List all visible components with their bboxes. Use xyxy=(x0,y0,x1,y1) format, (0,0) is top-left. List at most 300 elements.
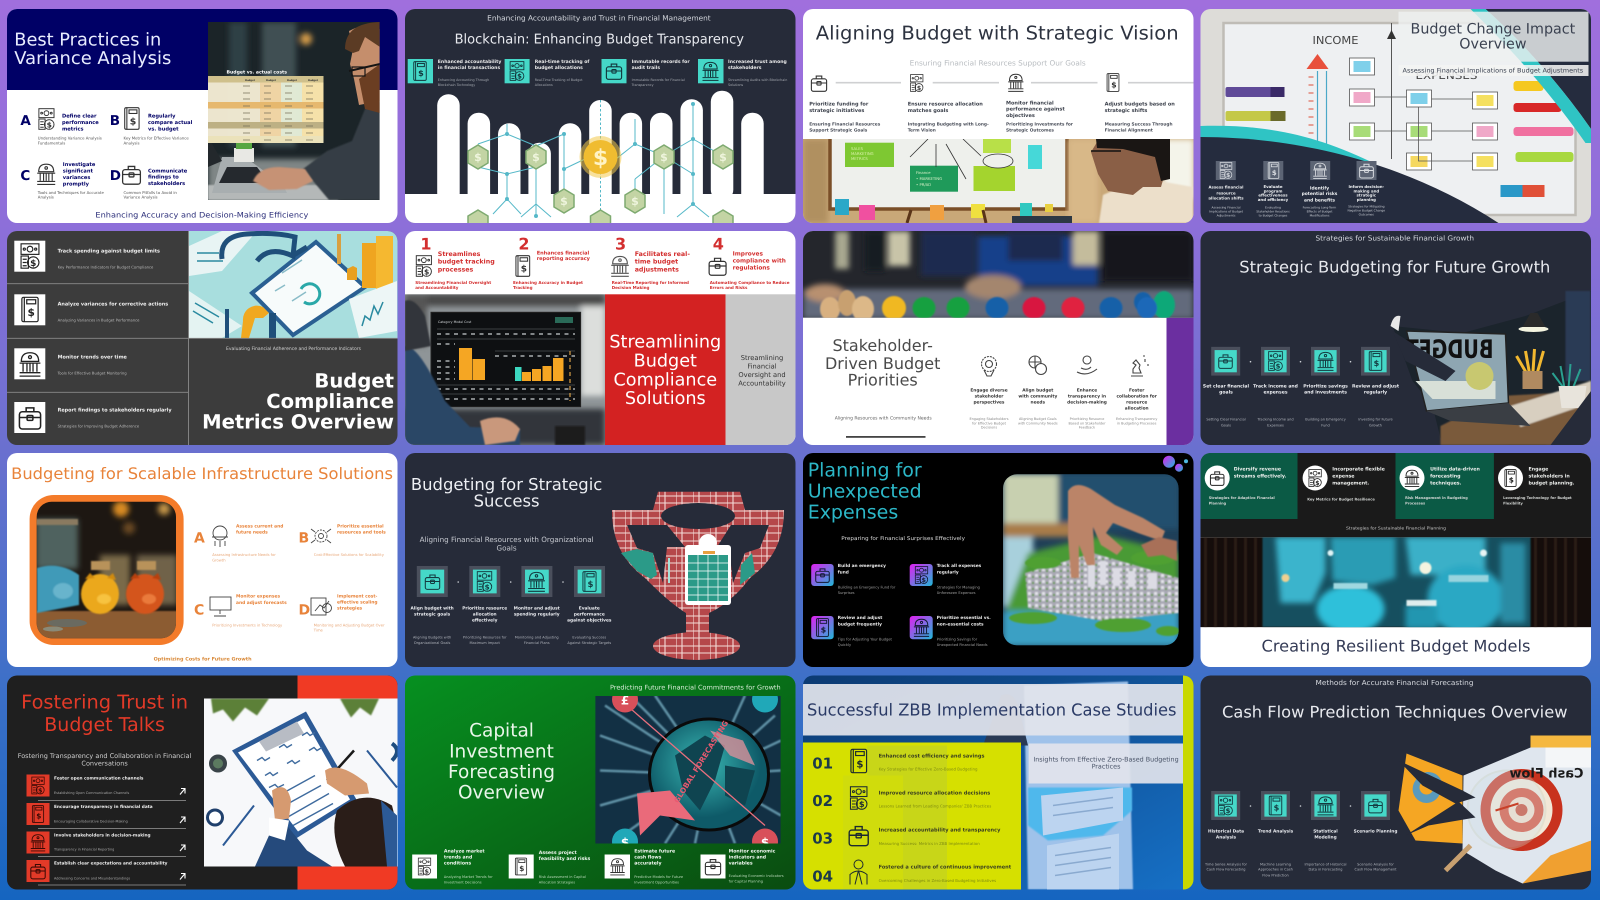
four step process: regularly xyxy=(1364,390,1387,396)
title: Budgeting for Scalable Infrastructure Solutions xyxy=(11,464,393,483)
impact columns: Strategies for Mitigating xyxy=(1348,205,1385,209)
impact columns: Inform decision- xyxy=(1348,184,1385,189)
slide: Fostering Trust in Budget Talks xyxy=(7,676,398,890)
item B: compare actual vs budget: vs. budget xyxy=(148,126,179,132)
item A: define metrics: performance xyxy=(62,120,99,126)
expense tips: non-essential costs xyxy=(937,621,984,627)
yellow case study list: Improved resource allocation decisions xyxy=(879,790,990,796)
four step process: Prioritize savings xyxy=(1303,384,1348,390)
four recommendations: Flexibility xyxy=(1503,501,1524,505)
slide: Budgeting for Scalable Infrastructure Solutions xyxy=(7,453,398,667)
four techniques: Statistical xyxy=(1313,828,1338,834)
four steps: allocation xyxy=(473,611,497,617)
strategy items: resources and tools xyxy=(337,530,386,536)
item D: communicate findings: Common Pitfalls to Avoid in xyxy=(124,190,177,195)
expense tips: Prioritize essential vs. xyxy=(937,615,991,621)
four benefits: Streamlining Financial Oversight xyxy=(415,280,491,285)
feature list: Blockchain Technology xyxy=(438,83,475,87)
four benefits: 2 xyxy=(518,234,530,253)
feature list: Solutions xyxy=(728,83,743,87)
item C: investigate variances: Tools and Techniques for Accurate xyxy=(37,190,104,195)
subtitle panel: Insights from Effective Zero-Based Budgeting xyxy=(1033,756,1179,764)
strategy items: Prioritize essential xyxy=(337,524,384,530)
yellow case study list: Key Strategies for Effective Zero-Based Budgeting xyxy=(879,766,978,772)
rows of tracked metrics: Strategies for Improving Budget Adherence xyxy=(58,424,140,428)
impact columns: Outcomes xyxy=(1359,213,1374,217)
photo: monitor with budget dashboard: Category Model Cost xyxy=(438,320,472,324)
forecasting actions: Predictive Models for Future xyxy=(634,875,683,879)
item C: investigate variances: variances xyxy=(63,175,90,181)
four techniques: Modeling xyxy=(1314,834,1337,840)
chart: pillars with blockchain network: $ xyxy=(560,195,568,208)
four recommendations: Incorporate flexible xyxy=(1332,467,1385,473)
forecasting actions xyxy=(412,848,784,884)
feature list: stakeholders xyxy=(728,65,762,71)
four benefits: 3 xyxy=(615,234,626,253)
photo: man at whiteboard with sticky notes: SALES xyxy=(851,146,864,151)
strategy items: B xyxy=(298,531,309,547)
title band xyxy=(803,684,1183,736)
image: target and magnifier with cash flow paper xyxy=(1398,736,1591,884)
impact columns: resource xyxy=(1216,190,1236,195)
timeline of goals: strategic initiatives xyxy=(809,108,864,114)
footer subtitle: Enhancing Accuracy and Decision-Making Efficiency xyxy=(95,210,309,219)
strategy items: A xyxy=(194,531,205,547)
priority columns: with Community Needs xyxy=(1018,421,1058,425)
rows of tracked metrics: Tools for Effective Budget Monitoring xyxy=(57,371,127,375)
expense tips: Tips for Adjusting Your Budget xyxy=(837,637,893,641)
expense tips: budget frequently xyxy=(838,621,882,627)
timeline of goals xyxy=(809,74,1194,133)
impact columns: Effects of Budget xyxy=(1307,210,1333,214)
priority columns: transparency in xyxy=(1068,393,1106,399)
forecasting actions: Investment Decisions xyxy=(444,880,482,884)
illustration: phone and businessman xyxy=(983,682,1133,890)
item A: define metrics: Define clear xyxy=(62,113,97,119)
photo: colored beads with blurred suits xyxy=(803,231,1194,322)
feature list: Streamlining Audits with Blockchain xyxy=(728,78,787,82)
item C: investigate variances xyxy=(20,162,104,200)
strategy items: Monitoring and Adjusting Budget Over xyxy=(314,623,385,627)
four steps: Aligning Budgets with xyxy=(413,635,451,639)
list of trust practices: Addressing Concerns and Misunderstandings xyxy=(54,876,130,880)
impact columns: Evaluating xyxy=(1265,206,1281,210)
four recommendations xyxy=(1205,466,1575,505)
timeline of goals: Adjust budgets based on xyxy=(1105,101,1175,107)
photo: hand over miniature city xyxy=(1003,474,1180,646)
title: Budget Talks xyxy=(44,714,165,736)
four techniques xyxy=(1204,791,1397,878)
title band: Successful ZBB Implementation Case Studies xyxy=(807,700,1176,720)
four techniques: Analysis xyxy=(1216,834,1237,840)
four benefits: regulations xyxy=(733,265,770,272)
impact columns: Modifications xyxy=(1310,214,1330,218)
title: Metrics Overview xyxy=(202,410,394,433)
forecasting actions: variables xyxy=(729,860,753,866)
timeline of goals: Financial Alignment xyxy=(1105,127,1153,133)
four step process: Building an Emergency xyxy=(1305,418,1346,422)
strategy items: future needs xyxy=(236,530,268,536)
image: global forecasting globe: £ xyxy=(621,694,629,708)
title panel: Overview xyxy=(1459,36,1527,52)
four steps: strategic goals xyxy=(414,611,451,617)
expense tips: Surprises xyxy=(838,591,855,595)
expense tips: fund xyxy=(838,569,849,575)
strategy items: Cost-Effective Solutions for Scalability xyxy=(314,553,385,557)
expense tips: Strategies for Managing xyxy=(937,585,980,589)
gray subtitle panel: Streamlining xyxy=(741,354,783,362)
four step process: Tracking Income and xyxy=(1256,418,1294,422)
table: budget vs actual costs: Budget xyxy=(308,79,319,82)
subtitle: Enhancing Accountability and Trust in Financial Management xyxy=(487,14,711,23)
four step process: Growth xyxy=(1369,423,1382,427)
priority columns: stakeholder xyxy=(975,393,1004,399)
list of trust practices: Involve stakeholders in decision-making xyxy=(54,832,151,838)
forecasting actions: conditions xyxy=(444,860,471,866)
impact columns: Assess financial xyxy=(1209,184,1243,189)
four steps: Organizational Goals xyxy=(414,641,450,645)
four techniques: Flow Prediction xyxy=(1262,874,1289,878)
item D: communicate findings: findings to xyxy=(148,175,179,181)
item A: define metrics: Understanding Variance Analysis xyxy=(38,135,102,140)
photo: whiteboard flow chart with markers: INCOME xyxy=(1312,34,1359,47)
priority columns: Align budget xyxy=(1022,387,1053,393)
strategy items: C xyxy=(194,602,204,618)
four step process: Set clear financial xyxy=(1203,384,1250,390)
item D: communicate findings: D xyxy=(110,168,121,184)
feature list: Real-time tracking of xyxy=(535,59,590,65)
four steps: Prioritize resource xyxy=(462,605,507,611)
expense tips: Building an Emergency Fund for xyxy=(838,585,896,589)
subtitle: Goals xyxy=(497,544,517,553)
table: budget vs actual costs: Budget vs. actual costs xyxy=(226,70,287,76)
image: global forecasting globe: $ xyxy=(761,836,769,850)
feature list: audit trails xyxy=(632,65,660,71)
list of trust practices: Transparency in Financial Reporting xyxy=(53,848,114,852)
slide: Successful ZBB Implementation Case Studies xyxy=(803,676,1194,890)
four steps: Monitoring and Adjusting xyxy=(515,635,559,639)
forecasting actions: Analyzing Market Trends for xyxy=(444,875,493,879)
expense tips: regularly xyxy=(937,569,959,575)
subtitle: Methods for Accurate Financial Forecasting xyxy=(1316,679,1474,687)
title: Forecasting xyxy=(448,762,555,783)
forecasting actions: indicators and xyxy=(729,854,766,860)
expense tips: Review and adjust xyxy=(838,615,882,621)
item B: compare actual vs budget: compare actual xyxy=(148,120,193,126)
impact columns: Identify xyxy=(1310,185,1329,191)
feature list: in financial transactions xyxy=(438,65,500,71)
feature list xyxy=(408,59,787,87)
feature list: Immutable records for xyxy=(632,59,690,65)
item D: communicate findings: Variance Analysis xyxy=(124,195,158,200)
rows of tracked metrics: Track spending against budget limits xyxy=(58,248,160,254)
timeline of goals: Measuring Success Through xyxy=(1105,121,1173,127)
chart: pillars with blockchain network: $ xyxy=(532,151,540,164)
photo: man at laptop with budget table xyxy=(208,22,380,200)
title panel xyxy=(1398,12,1588,62)
four techniques: Cash Flow Forecasting xyxy=(1206,868,1246,872)
trophy with grid and phone xyxy=(612,492,784,660)
subtitle panel: Practices xyxy=(1092,762,1121,770)
image: global forecasting globe: GLOBAL FORECASTING xyxy=(672,719,730,805)
four step process: Investing for Future xyxy=(1358,418,1393,422)
four recommendations: techniques. xyxy=(1430,480,1462,486)
impact columns: program xyxy=(1264,188,1282,193)
feature list: Increased trust among xyxy=(728,59,787,65)
image: target and magnifier with cash flow paper: Cash Flow xyxy=(1510,766,1584,782)
forecasting actions: Allocation Strategies xyxy=(539,880,575,884)
table: budget vs actual costs: Budget xyxy=(287,79,298,82)
red title panel: Solutions xyxy=(625,389,706,409)
title: Fostering Trust in xyxy=(21,692,188,714)
timeline of goals: Ensuring Financial Resources xyxy=(809,121,881,127)
slide: Cash Flow Prediction Techniques Overview xyxy=(1200,676,1591,890)
list of trust practices: Foster open communication channels xyxy=(54,776,144,782)
four step process: Goals xyxy=(1221,423,1231,427)
title: Planning for xyxy=(808,460,922,482)
impact columns: Assessing Financial xyxy=(1212,206,1241,210)
four benefits: processes xyxy=(438,266,474,273)
title panel: Budget Change Impact xyxy=(1411,21,1576,37)
four techniques: Machine Learning xyxy=(1260,862,1291,866)
strategy items: strategies xyxy=(337,606,363,612)
item A: define metrics xyxy=(20,109,102,145)
priority columns: Enhance xyxy=(1077,387,1097,393)
title: Blockchain: Enhancing Budget Transparency xyxy=(455,31,744,47)
image: global forecasting globe xyxy=(595,686,781,854)
rows of tracked metrics: Report findings to stakeholders regularly xyxy=(58,408,172,414)
four benefits: compliance with xyxy=(733,257,786,264)
table: budget vs actual costs: Budget xyxy=(266,79,277,82)
feature list: Transparency xyxy=(631,83,654,87)
feature list: Real-Time Tracking of Budget xyxy=(535,78,583,82)
subtitle: Evaluating Financial Adherence and Performance Indicators xyxy=(226,346,362,352)
priority columns: for Effective Budget xyxy=(972,421,1007,425)
impact columns: Negative Budget Change xyxy=(1347,208,1385,212)
four steps: spending regularly xyxy=(514,611,560,617)
yellow case study list: 02 xyxy=(812,792,833,810)
impact columns: Implications of Budget xyxy=(1209,210,1244,214)
timeline of goals: matches goals xyxy=(908,108,948,114)
subtitle: Preparing for Financial Surprises Effectively xyxy=(841,536,965,542)
forecasting actions: trends and xyxy=(444,854,472,860)
priority columns: Prioritizing Resource xyxy=(1070,417,1104,421)
timeline of goals: Prioritizing Investments for xyxy=(1006,121,1074,127)
slide: Budget Compliance Metrics Overview xyxy=(7,231,398,445)
strategy items: effective scaling xyxy=(337,600,378,606)
list of trust practices xyxy=(26,774,186,885)
item C: investigate variances: C xyxy=(20,168,30,184)
four benefits: time budget xyxy=(635,259,678,266)
priority columns: Feedback xyxy=(1079,426,1095,430)
four recommendations: Utilize data-driven xyxy=(1430,467,1480,473)
title: Expenses xyxy=(808,501,898,523)
impact columns: and benefits xyxy=(1304,198,1335,204)
forecasting actions: cash flows xyxy=(634,854,662,860)
timeline of goals: Support Strategic Goals xyxy=(809,127,868,133)
priority columns: Enhancing Transparency xyxy=(1116,417,1157,421)
title: Variance Analysis xyxy=(14,49,171,69)
forecasting actions: feasibility and risks xyxy=(539,856,591,862)
image: global forecasting globe: $ xyxy=(621,836,629,850)
four benefits: 1 xyxy=(420,234,432,253)
impact columns: to Budget Changes xyxy=(1259,214,1288,218)
expense tips: Unforeseen Expenses xyxy=(937,591,976,595)
timeline of goals: objectives xyxy=(1006,113,1035,119)
four techniques: Importance of Historical xyxy=(1304,862,1347,866)
four benefits xyxy=(415,234,790,290)
item A: define metrics: A xyxy=(20,113,31,129)
red title panel xyxy=(605,294,726,445)
subtitle: Strategies for Sustainable Financial Planning xyxy=(1346,526,1446,531)
four benefits: Automating Compliance to Reduce xyxy=(710,280,790,285)
impact columns: Evaluate xyxy=(1263,184,1283,189)
four recommendations: Planning xyxy=(1209,501,1227,505)
photo: man at whiteboard with sticky notes: MARKETING xyxy=(851,151,874,156)
title: Success xyxy=(474,492,540,511)
four steps: performance xyxy=(574,611,605,617)
subtitle: Aligning Financial Resources with Organizational xyxy=(420,535,594,544)
priority columns: Decisions xyxy=(981,426,997,430)
strategy items: Time xyxy=(313,629,324,633)
impact columns: strategic xyxy=(1356,193,1377,198)
four benefits: Tracking xyxy=(513,285,533,290)
item D: communicate findings: Communicate xyxy=(148,168,188,174)
four benefits: and Accountability xyxy=(415,285,459,290)
chart: pillars with blockchain network: $ xyxy=(474,151,482,164)
priority columns: in Budgeting Processes xyxy=(1117,421,1157,425)
four recommendations: Key Metrics for Budget Resilience xyxy=(1307,497,1375,501)
title: Aligning Budget with Strategic Vision xyxy=(816,22,1179,44)
title: Investment xyxy=(449,742,554,762)
illustration: isometric charts xyxy=(189,231,398,338)
table: budget vs actual costs xyxy=(208,70,324,143)
expense tips: Prioritizing Savings for xyxy=(937,637,978,641)
item D: communicate findings xyxy=(110,166,188,200)
impact columns: effectiveness xyxy=(1258,193,1288,198)
rows of tracked metrics xyxy=(7,231,398,445)
slide: Stakeholder-Driven Budget Priorities xyxy=(803,231,1194,445)
yellow case study list: 04 xyxy=(812,868,833,886)
four techniques: Scenario Analysis for xyxy=(1357,862,1394,866)
four benefits: Improves xyxy=(733,250,763,257)
four steps: Against Strategic Targets xyxy=(567,641,611,645)
decorative bubbles xyxy=(1163,456,1188,472)
four benefits: Enhancing Accuracy in Budget xyxy=(513,280,583,285)
title: Stakeholder- xyxy=(832,336,933,355)
item C: investigate variances: Analysis xyxy=(38,195,54,200)
photo: laptop with budget on desk in brush shape xyxy=(1390,291,1591,445)
four benefits: Errors and Risks xyxy=(710,285,748,290)
four recommendations: Diversify revenue xyxy=(1234,467,1281,473)
rows of tracked metrics: Monitor trends over time xyxy=(58,355,128,361)
strategy items: and adjust forecasts xyxy=(236,600,287,606)
expense tips: Build an emergency xyxy=(838,563,886,569)
photo: man at whiteboard with sticky notes: Finance xyxy=(916,170,931,175)
yellow case study list: Fostered a culture of continuous improvement xyxy=(879,864,1012,870)
feature list: Immutable Records for Financial xyxy=(632,78,685,82)
subtitle: Strategies for Sustainable Financial Growth xyxy=(1316,234,1474,242)
slide: Creating Resilient Budget Models xyxy=(1200,453,1591,667)
forecasting actions: Analyze market xyxy=(444,848,485,854)
photo: whiteboard flow chart with markers xyxy=(1200,9,1591,223)
impact columns: potential risks xyxy=(1302,191,1338,197)
four techniques: Trend Analysis xyxy=(1258,828,1294,834)
four recommendations: expense xyxy=(1332,475,1355,480)
forecasting actions: Evaluating Economic Indicators xyxy=(729,874,784,878)
title: Compliance xyxy=(266,390,394,413)
priority columns: Foster xyxy=(1129,387,1145,393)
chart: pillars with blockchain network: $ xyxy=(719,151,727,164)
four step process: Track income and xyxy=(1253,384,1298,390)
four step process: Review and adjust xyxy=(1352,384,1400,390)
subtitle panel: Assessing Financial Implications of Budget Adjustments xyxy=(1402,68,1583,75)
title: Cash Flow Prediction Techniques Overview xyxy=(1222,702,1568,722)
chart: pillars with blockchain network: $ xyxy=(660,151,668,164)
expense tips: Track all expenses xyxy=(937,563,982,569)
impact columns: making and xyxy=(1353,188,1379,193)
four benefits: Enhances financial xyxy=(537,250,589,256)
feature list: Enhancing Accounting Through xyxy=(438,78,489,82)
subtitle: Predicting Future Financial Commitments for Growth xyxy=(610,684,781,692)
four benefits: Real-Time Reporting for Informed xyxy=(612,280,689,285)
four recommendations: Strategies for Adaptive Financial xyxy=(1209,496,1275,500)
four benefits: Streamlines xyxy=(438,251,481,258)
feature list: Allocations xyxy=(535,83,553,87)
title: Strategic Budgeting for Future Growth xyxy=(1239,257,1550,276)
four recommendations: streams effectively. xyxy=(1234,473,1287,479)
strategy items: Monitor expenses xyxy=(236,594,280,600)
strategy items: Assess current and xyxy=(236,524,283,530)
item A: define metrics: Fundamentals xyxy=(38,140,65,145)
four techniques: Approaches in Cash xyxy=(1258,868,1293,872)
expense tips: Unexpected Financial Needs xyxy=(937,643,988,647)
item A: define metrics: metrics xyxy=(62,126,84,132)
list of trust practices: Establish clear expectations and accountability xyxy=(54,860,168,866)
subtitle: Aligning Resources with Community Needs xyxy=(835,415,932,421)
four steps: Prioritizing Resources for xyxy=(463,635,507,639)
four benefits: budget tracking xyxy=(438,259,495,266)
yellow case study list: 03 xyxy=(812,830,833,848)
impact columns: and efficiency xyxy=(1258,197,1289,202)
yellow case study list: Enhanced cost efficiency and savings xyxy=(879,754,984,760)
slide: Capital Investment Forecasting Overview xyxy=(405,676,796,890)
subtitle: Conversations xyxy=(81,760,128,768)
priority columns: Based on Stakeholder xyxy=(1068,421,1106,425)
four recommendations: Risk Management in Budgeting xyxy=(1405,496,1468,500)
four recommendations: Processes xyxy=(1405,501,1425,505)
timeline of goals: Term Vision xyxy=(908,127,936,133)
slide: Best Practices in Variance Analysis xyxy=(7,9,398,223)
four recommendations: management. xyxy=(1332,480,1369,486)
gray subtitle panel: Oversight and xyxy=(738,371,786,379)
item B: compare actual vs budget: Key Metrics for Effective Variance xyxy=(124,135,189,140)
priority columns: perspectives xyxy=(973,399,1005,405)
four step process: and investments xyxy=(1304,390,1347,396)
priority columns: Engage diverse xyxy=(970,387,1008,393)
yellow case study list: Lessons Learned from Leading Companies' ZBB Practices xyxy=(879,804,991,808)
item C: investigate variances: promptly xyxy=(63,181,90,187)
impact columns: allocation shifts xyxy=(1208,195,1244,200)
priority columns: with community xyxy=(1018,393,1057,399)
four steps: Maximum Impact xyxy=(469,641,501,645)
strategy items: D xyxy=(298,602,310,618)
title: Best Practices in xyxy=(14,31,161,51)
subtitle: Fostering Transparency and Collaboration in Financial xyxy=(18,752,192,760)
four recommendations: forecasting xyxy=(1430,474,1461,480)
four techniques: Cash Flow Management xyxy=(1355,868,1397,872)
red title panel: Budget xyxy=(634,351,697,371)
